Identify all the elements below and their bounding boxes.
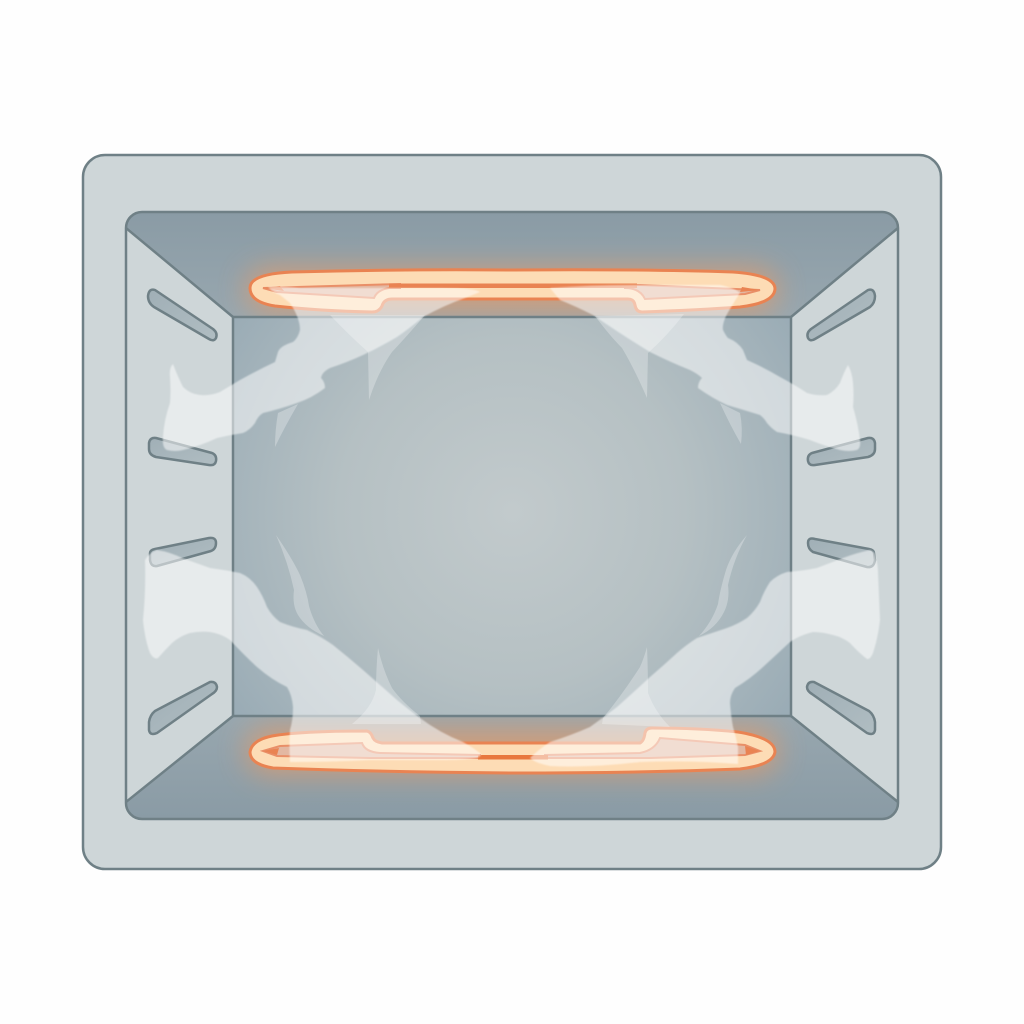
heat wisps [275, 314, 747, 727]
glow: bottom element [246, 728, 778, 774]
bottom heating element [250, 728, 775, 773]
heat flow: top right [550, 285, 860, 451]
bottom wall [126, 716, 898, 819]
oven outer frame [83, 155, 941, 869]
heat flow: top left [163, 287, 480, 451]
right wall [791, 228, 898, 802]
rack slots: left wall [148, 290, 217, 734]
heat flow: bottom right [530, 550, 880, 766]
left wall [126, 228, 233, 802]
rack slots: right wall [807, 290, 875, 734]
glow: top element [246, 268, 778, 312]
back wall [233, 317, 791, 716]
heat flow: bottom left [143, 550, 481, 762]
top wall [126, 212, 898, 317]
cavity edges [126, 212, 898, 819]
top heating element [250, 270, 775, 312]
